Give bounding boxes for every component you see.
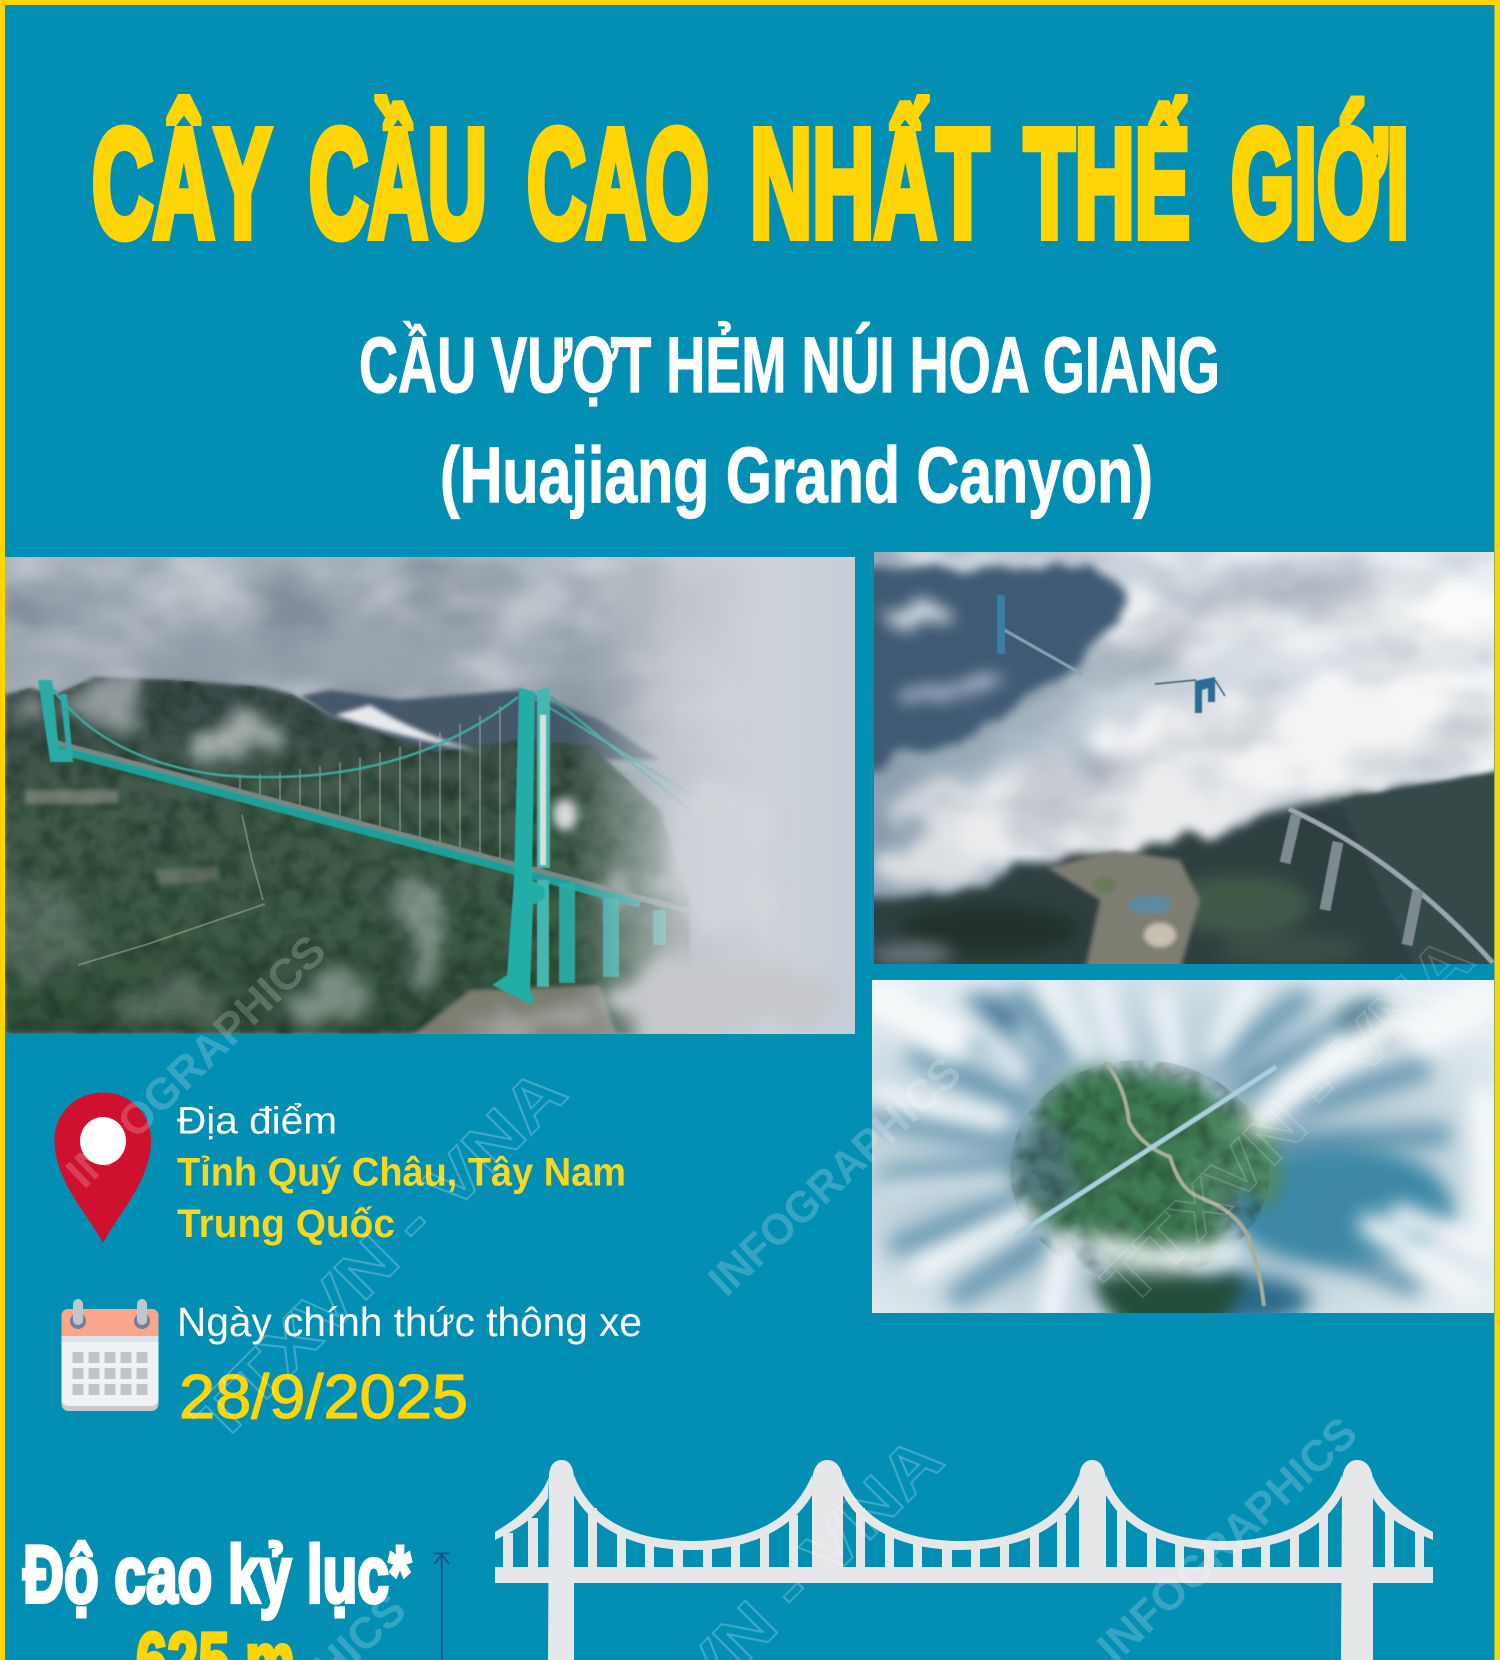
opening date text block: Ngày chính thức thông xe [177, 1299, 642, 1345]
watermark: INFOGRAPHICS and TTXVN - VNA: TTXVN - VNA [178, 1054, 580, 1456]
title [92, 98, 1409, 270]
height record heading: Độ cao kỷ lục* [23, 1530, 411, 1620]
watermark: INFOGRAPHICS and TTXVN - VNA: TTXVN - VNA [1088, 921, 1486, 1320]
subtitle: (Huajiang Grand Canyon) [440, 430, 1153, 519]
icon: map pin [54, 1092, 151, 1243]
location text block [177, 1100, 626, 1246]
title: NHẤT [750, 98, 989, 270]
height record heading [23, 1530, 411, 1660]
title: CAO [527, 98, 709, 270]
arrow: height dimension [434, 1554, 450, 1660]
location text block: Tỉnh Quý Châu, Tây Nam [177, 1150, 626, 1194]
illustration: suspension bridge [495, 1460, 1433, 1660]
photo: aerial view of the bridge with radial clouds [872, 980, 1494, 1334]
photo: bridge tower rising out of a sea of clouds [860, 550, 1500, 980]
watermark: INFOGRAPHICS and TTXVN - VNA: INFOGRAPHICS [57, 926, 336, 1197]
photo: suspension bridge above clouds and mountains [0, 557, 855, 1045]
location text block: Địa điểm [177, 1100, 337, 1142]
location text block: Trung Quốc [177, 1202, 395, 1246]
icon: calendar [62, 1299, 158, 1411]
watermark: INFOGRAPHICS and TTXVN - VNA [57, 921, 1486, 1660]
opening date text block: 28/9/2025 [179, 1363, 468, 1432]
title: CÂY [92, 98, 271, 270]
opening date text block [177, 1299, 642, 1432]
subtitle [359, 320, 1220, 519]
watermark: INFOGRAPHICS and TTXVN - VNA: INFOGRAPHICS [699, 1048, 971, 1305]
title: CẦU [309, 98, 487, 270]
title: THẾ [1024, 98, 1190, 270]
